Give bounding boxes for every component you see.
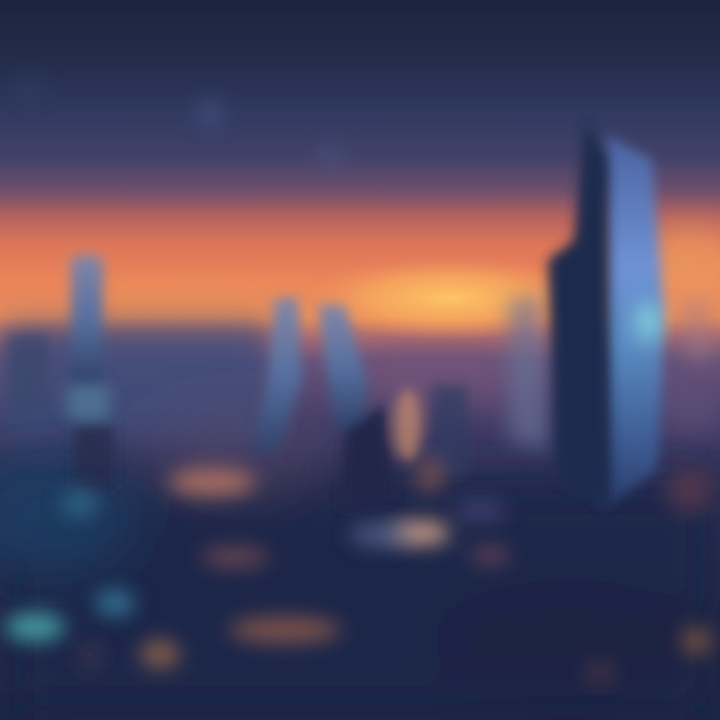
sunset glow bbox=[70, 225, 720, 340]
main right tower bbox=[508, 120, 664, 510]
right background tower bbox=[682, 300, 716, 360]
teal building lights bbox=[5, 390, 506, 641]
faint stars bbox=[16, 74, 343, 170]
left tower bbox=[8, 255, 114, 490]
tower halo bbox=[508, 295, 550, 450]
warm building lights bbox=[78, 457, 714, 682]
city base shadow bbox=[0, 415, 720, 720]
distant city haze bbox=[0, 325, 720, 440]
middle towers bbox=[250, 298, 468, 510]
tower blue face bbox=[600, 135, 664, 510]
tower dark face bbox=[548, 120, 612, 510]
cyan reflection bbox=[636, 302, 660, 342]
